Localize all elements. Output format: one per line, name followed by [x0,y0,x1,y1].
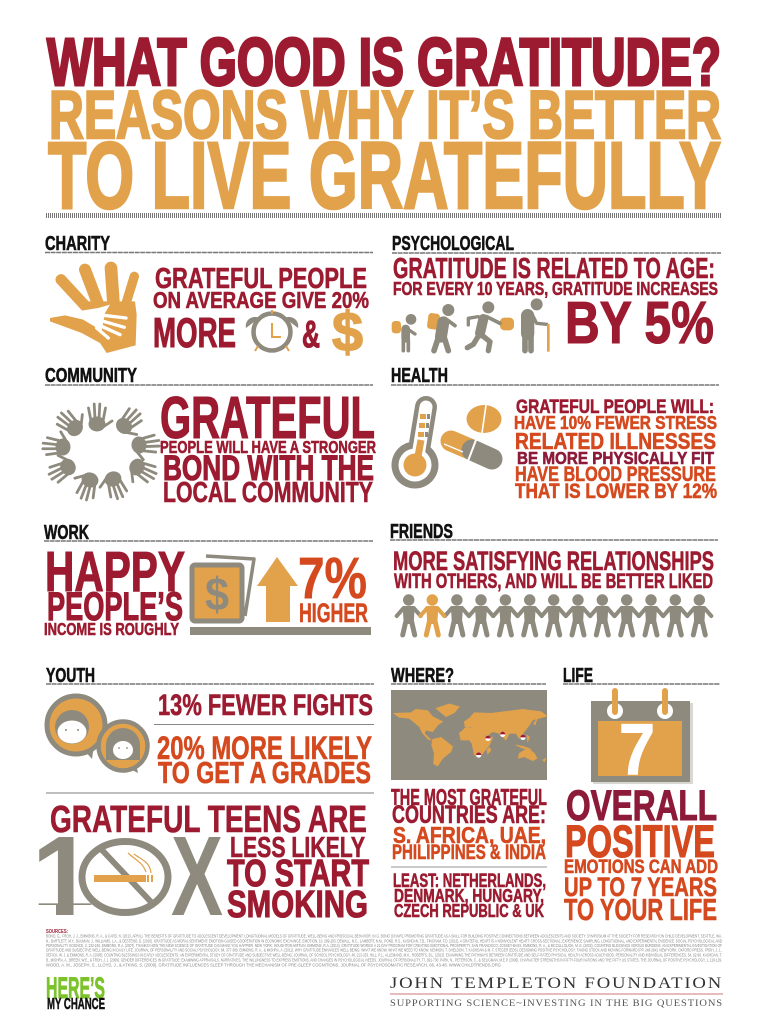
text: least netherlands: LEAST: NETHERLANDS, [393,871,546,892]
text: 7%: 7% [298,546,367,611]
text: countries are: COUNTRIES ARE: [392,801,546,829]
icon: girl speech bubble [98,722,148,773]
text: income is roughly: INCOME IS ROUGHLY [44,619,179,639]
panel: psychological [392,233,721,356]
icon: pills [444,405,502,461]
chart: 10x no smoking [30,813,223,939]
text: bond with the: BOND WITH THE [163,449,374,488]
text: higher: HIGHER [299,598,368,628]
icon: dollar sign: $ [332,300,363,363]
icon: chain of people [397,594,711,635]
world map [391,690,547,780]
text: grateful people will: GRATEFUL PEOPLE WILL: [516,397,714,418]
logo: john templeton foundation: SUPPORTING SCIENCE~INVESTING IN THE BIG QUESTIONS [390,999,723,1009]
text: more: MORE [153,309,236,356]
text: that is lower by 12%: THAT IS LOWER BY 12% [515,480,717,503]
text: 20% more likely: 20% MORE LIKELY [157,730,372,766]
logo: here's my chance: HERE’S [46,972,105,1005]
heading: charity: CHARITY [45,233,110,255]
text: the most grateful: THE MOST GRATEFUL [391,784,547,810]
icon: calendar: 7 [619,710,655,790]
text: on average give 20%: ON AVERAGE GIVE 20% [153,287,369,313]
text: to start: TO START [227,853,369,895]
heading: psychological: PSYCHOLOGICAL [392,233,514,255]
text: have 10% fewer stress: HAVE 10% FEWER STRESS [514,413,717,433]
panel: health [391,365,719,503]
sources: SOURCES: [46,929,68,935]
text: related illnesses: RELATED ILLNESSES [515,428,716,454]
text: people will have a stronger: PEOPLE WILL HAVE A STRONGER [160,437,376,457]
text: local community: LOCAL COMMUNITY [163,477,373,509]
text: grateful: GRATEFUL [160,385,375,451]
base bar [190,627,371,635]
text: philippines & india: PHILIPPINES & INDIA [392,840,546,864]
panel: work [44,522,373,639]
panel: friends [390,521,718,635]
text: by 5%: BY 5% [565,290,714,356]
panel: where [391,665,547,921]
logo: here's my chance [46,972,105,1013]
icon: calendar [591,691,693,790]
icon: alarm clock [246,310,298,351]
text: ampersand: & [302,314,320,356]
icon: up arrow [257,557,298,622]
sources [46,929,722,968]
icon: money stack: $ [205,568,229,620]
icon: boy speech bubble [47,696,105,759]
text: denmark hungary: DENMARK, HUNGARY, [394,886,544,906]
text: emotions can add: EMOTIONS CAN ADD [564,857,718,878]
panel: youth [30,665,374,939]
panel: charity [45,233,373,363]
heading: community: COMMUNITY [45,365,137,387]
text: people's: PEOPLE’S [47,585,183,629]
text: to get a grades: TO GET A GRADES [158,755,371,790]
text: have blood pressure: HAVE BLOOD PRESSURE [515,463,716,486]
text: overall: OVERALL [566,782,717,830]
heading: friends: FRIENDS [390,521,453,543]
chart: 10x no smoking: X [171,813,223,939]
logo: here's my chance: MY CHANCE [47,996,105,1013]
panel: life [563,665,720,927]
logo: john templeton foundation [390,975,723,1009]
heading: where: WHERE? [391,665,454,687]
heading: health: HEALTH [391,365,448,387]
heading: work: WORK [44,522,89,544]
text: grateful teens are: GRATEFUL TEENS ARE [50,799,367,841]
text: czech republic & uk: CZECH REPUBLIC & UK [394,901,544,921]
text: smoking: SMOKING [227,884,368,926]
text: s. africa, uae: S. AFRICA, UAE, [393,822,546,848]
text: positive: POSITIVE [565,816,715,867]
chart: 10x no smoking: 1 [32,813,94,939]
heading: youth: YOUTH [46,665,95,687]
text: grateful people: GRATEFUL PEOPLE [155,263,367,295]
text: up to 7 years: UP TO 7 YEARS [564,872,717,902]
icon: thermometer [392,407,438,488]
icon: helping hands [50,268,137,353]
text: 13% fewer fights: 13% FEWER FIGHTS [158,689,373,722]
panel: community [43,365,376,509]
icon: money stack [192,556,254,621]
title [47,25,721,229]
heading: life: LIFE [563,665,593,687]
icon: people aging [392,298,548,352]
logo: john templeton foundation: JOHN TEMPLETON FOUNDATION [390,975,723,992]
text: be more physically fit: BE MORE PHYSICALLY FIT [517,448,714,468]
text: less likely: LESS LIKELY [230,832,365,864]
sources: WOOD, A. M., JOSEPH, S., LLOYD, J., & ATKINS, S. (2009). GRATITUDE INFLUENCES SLEEP THROUGH THE MECHANISM OF PRE-SLEEP COGNITIONS. JOURNAL OF PSYCHOSOMATIC RESEARCH, 66, 43-48. WWW.CHILDTRENDS.ORG [46,962,501,968]
icon: circle of hands [43,404,160,503]
text: happy: HAPPY [45,540,185,604]
